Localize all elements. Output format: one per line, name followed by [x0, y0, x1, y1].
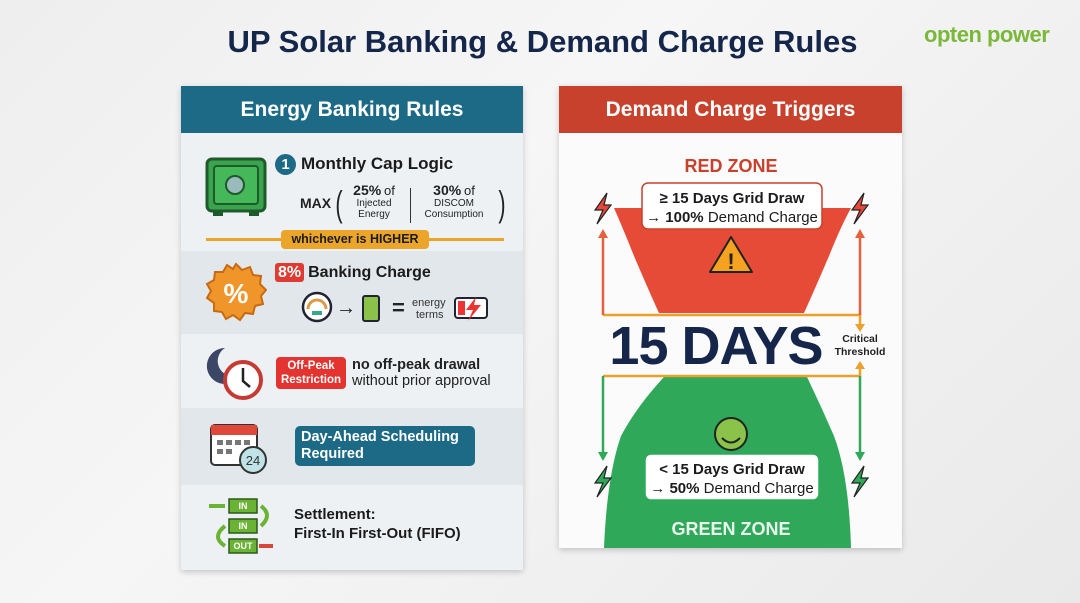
green callout: → 50% Demand Charge [650, 480, 814, 497]
row: FIFO [209, 498, 461, 554]
panel: demand charge triggers [559, 86, 902, 548]
icon: safe [206, 158, 266, 216]
icon: fifo: IN [238, 521, 248, 531]
red zone shape [614, 156, 851, 313]
text: monthly cap logic: 1 [281, 156, 290, 173]
tag: day-ahead [295, 426, 475, 466]
icons: lightning [595, 193, 868, 497]
tag: off-peak: Restriction [281, 374, 341, 386]
icon: smiley [715, 418, 747, 450]
panel: energy banking rules: whichever is HIGHER [291, 232, 419, 246]
row: day-ahead scheduling [181, 408, 523, 485]
icon: fifo: IN [238, 501, 248, 511]
icons: meter to battery: → [336, 297, 356, 319]
formula: DISCOM [434, 198, 474, 209]
icons: meter to battery: energy [412, 297, 446, 309]
formula: 30% of [433, 182, 475, 198]
heading: energy banking [181, 86, 523, 133]
icon: calendar [210, 424, 267, 474]
icon: fifo [209, 498, 273, 554]
tag: off-peak: Off-Peak [287, 360, 335, 372]
icon: warning [710, 237, 752, 274]
threshold lines and arrows [603, 234, 860, 456]
formula: ) [498, 183, 506, 224]
label: critical threshold: Critical [842, 333, 878, 345]
formula: ( [335, 183, 343, 224]
icons: meter to battery [302, 292, 488, 322]
icons: meter to battery: terms [416, 309, 444, 321]
text: no off-peak drawal: no off-peak drawal [352, 357, 480, 373]
formula: MAX [300, 195, 331, 211]
icon: moon clock [206, 348, 263, 400]
icons: meter to battery: = [392, 295, 405, 320]
tag: off-peak [276, 357, 346, 389]
title: UP Solar Banking & Demand Charge Rules [228, 24, 857, 59]
red zone shape: RED ZONE [684, 156, 778, 176]
text: no off-peak drawal [352, 357, 491, 389]
green zone shape: GREEN ZONE [671, 519, 791, 539]
text: monthly cap logic: Monthly Cap Logic [301, 154, 453, 173]
icon: warning: ! [727, 249, 735, 274]
formula: Energy [358, 209, 390, 220]
icon: percent badge [206, 262, 267, 322]
row: off-peak restriction [206, 348, 491, 400]
icon: calendar: 24 [246, 453, 260, 468]
text: settlement [294, 506, 461, 542]
red callout: → 100% Demand Charge [646, 209, 818, 226]
red callout: ≥ 15 Days Grid Draw [660, 190, 805, 207]
label: critical threshold: Threshold [835, 346, 885, 358]
divider: whichever is higher [206, 238, 504, 241]
logo: opten power [924, 22, 1049, 47]
red callout [642, 183, 822, 229]
heading: demand charge [559, 86, 902, 133]
label: critical threshold [835, 333, 885, 358]
text: settlement: First-In First-Out (FIFO) [294, 525, 461, 542]
text: settlement: Settlement: [294, 506, 376, 523]
heading: energy banking: Energy Banking Rules [241, 98, 463, 121]
panel: energy banking rules [181, 86, 523, 570]
tag: day-ahead: Day-Ahead Scheduling [301, 429, 459, 445]
green callout: < 15 Days Grid Draw [659, 461, 805, 478]
tag: day-ahead: Required [301, 446, 364, 462]
icon: fifo: OUT [234, 541, 253, 551]
heading: demand charge: Demand Charge Triggers [606, 98, 855, 121]
row: banking charge [181, 251, 523, 334]
green zone shape [604, 377, 851, 548]
chart: hourglass [594, 156, 885, 548]
row: monthly cap [206, 154, 506, 224]
formula: 25% of [353, 182, 395, 198]
text: no off-peak drawal: without prior approval [352, 373, 491, 389]
big text: 15 days: 15 DAYS [609, 316, 823, 376]
icon: percent badge: % [224, 278, 249, 309]
formula: Consumption [425, 209, 483, 220]
text: banking charge: 8% Banking Charge [278, 264, 431, 281]
formula [300, 182, 506, 224]
green callout [645, 454, 819, 500]
formula: Injected [356, 198, 392, 209]
